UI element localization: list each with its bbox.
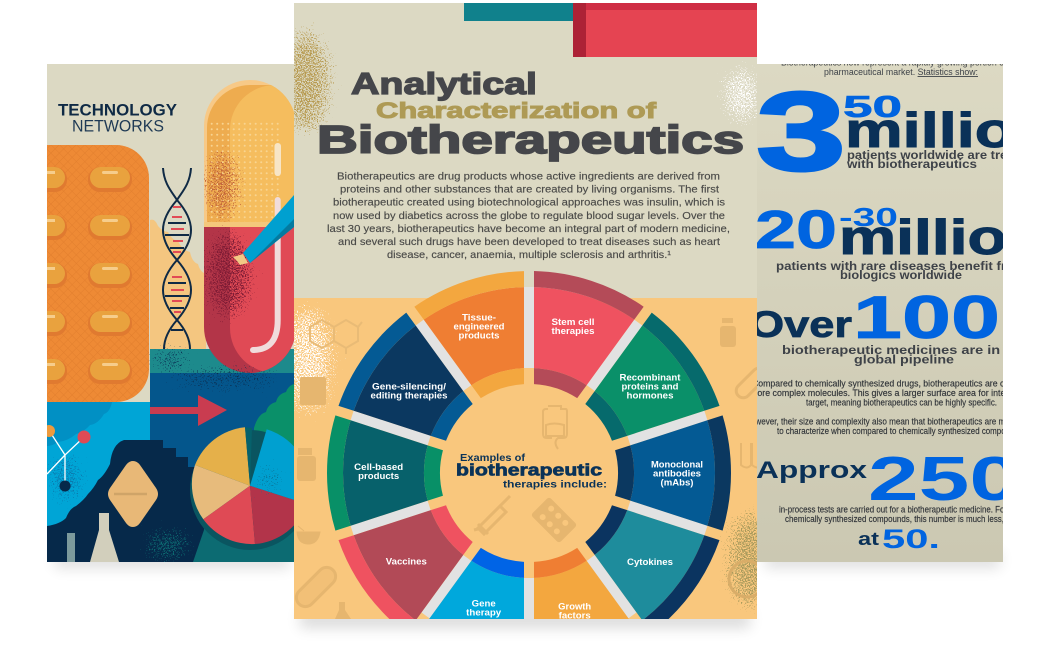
stat: 20-30 million: patients with rare diseases benefit from [776, 261, 1026, 273]
body text: However, their size and complexity also mean that biotherapeutics are more [745, 417, 1017, 427]
stat: 20-30 million: biologics worldwide [840, 270, 962, 282]
panel: left cover illustration [47, 64, 294, 562]
intro lines [781, 58, 1021, 77]
segment: stem cell therapies: Stem cell [552, 317, 594, 327]
wheel centre heading [456, 452, 607, 490]
segment: cell-based products: products [358, 471, 399, 481]
segment: monoclonal antibodies: antibodies [653, 468, 701, 478]
teal corner [193, 527, 294, 562]
segment: tissue-engineered products: products [458, 331, 500, 341]
dark blue block [150, 373, 294, 530]
flask and tube [67, 513, 119, 562]
capsule [204, 80, 294, 373]
segment: gene-silencing/editing therapies: Gene-silencing/ [372, 381, 447, 391]
intro paragraph: Biotherapeutics are drug products whose active ingredients are derived from [337, 170, 720, 182]
blue lower-left area [47, 402, 150, 526]
icon: beaker [300, 377, 326, 405]
icon: test tubes [740, 443, 757, 468]
sand wave background [150, 220, 206, 349]
segment: gene therapy: Gene [472, 599, 496, 609]
segment: vaccines: Vaccines [386, 557, 427, 567]
segment: stem cell therapies: therapies [552, 326, 594, 336]
segment: monoclonal antibodies [602, 415, 756, 559]
segment: recombinant proteins and hormones: Recombinant [620, 372, 680, 382]
stat: at 50 [858, 524, 940, 554]
wheel centre heading: therapies include: [503, 478, 607, 490]
stat: approx 250 [756, 445, 1020, 514]
stat: 350 million: 3 [756, 69, 846, 194]
navy stepped shape [47, 440, 204, 562]
stat: over 100: global pipeline [854, 355, 954, 367]
icon: right bottle [720, 318, 736, 347]
stat: 20-30 million: -30 [839, 202, 898, 232]
red arrow [150, 395, 227, 426]
icon: mortar [297, 526, 320, 544]
logo: Technology Networks: NETWORKS [72, 117, 164, 136]
stat: 20-30 million [755, 200, 1046, 282]
stat: 350 million [756, 69, 1050, 194]
pipette and hand [233, 195, 294, 265]
segment: monoclonal antibodies: Monoclonal [651, 459, 703, 469]
intro paragraph: disease, cancer, anaemia, multiple sclerosis and arthritis.¹ [387, 249, 672, 261]
top colour blocks [464, 3, 757, 57]
segment: cell-based products [302, 387, 456, 531]
stat: over 100: biotherapeutic medicines are in the [782, 345, 1026, 357]
panel: right statistics [745, 58, 1050, 562]
pie chart [190, 427, 294, 550]
in-process text [779, 505, 1007, 524]
segment: cell-based products: Cell-based [354, 462, 403, 472]
sand lower background [294, 298, 757, 619]
segment: cytokines: Cytokines [627, 557, 673, 567]
stat: 350 million: patients worldwide are treated [847, 150, 1034, 162]
stat: 350 million: million [845, 104, 1050, 158]
wheel gaps [352, 287, 706, 619]
title: Characterization of [376, 98, 657, 123]
intro paragraph: biotherapeutic created using biotechnological approaches was insulin, which is [333, 197, 725, 209]
panel shadows [55, 552, 1000, 628]
segment: cytokines [582, 501, 720, 619]
in-process text: chemically synthesized compounds, this number is much less, [785, 514, 1004, 524]
icon: molecule [310, 320, 362, 354]
stat: 20-30 million: million [839, 211, 1046, 265]
segment: stem cell therapies [534, 271, 644, 398]
segment: monoclonal antibodies: (mAbs) [660, 477, 694, 487]
stat: over 100: Over [749, 304, 852, 345]
teal band [150, 349, 294, 373]
green wave [254, 384, 294, 446]
stat: 350 million: with biotherapeutics [846, 159, 977, 171]
icon: bandage [295, 566, 337, 608]
segment: gene-silencing/editing therapies: editing therapies [370, 390, 448, 400]
stat: approx 250: Approx [756, 457, 868, 484]
segment: growth factors [526, 536, 629, 620]
icon: pill pack [532, 498, 576, 542]
title: Biotherapeutics [317, 119, 744, 162]
speckle textures [274, 22, 780, 618]
in-process text: in-process tests are carried out for a biotherapeutic medicine. For [779, 505, 1007, 515]
segment: gene-silencing/editing therapies [338, 302, 493, 445]
segment: recombinant proteins and hormones: hormones [626, 390, 674, 400]
stat: 350 million: 50 [843, 89, 902, 124]
segment: tissue-engineered products [414, 242, 578, 410]
icon: syringe [474, 496, 510, 534]
logo: Technology Networks [58, 104, 177, 132]
body text [745, 379, 1050, 436]
icon: left bottle [297, 448, 316, 481]
stat: approx 250: 250 [868, 445, 1020, 514]
intro paragraph: now used by diabetics across the globe to regulate blood sugar levels. Over the [333, 210, 725, 222]
intro paragraph: and several such drugs have been developed to treat diseases such as heart [338, 236, 720, 248]
faded background icons [293, 318, 769, 619]
title [317, 66, 744, 162]
icon: right capsule [734, 367, 757, 400]
wheel centre heading: biotherapeutic [456, 462, 602, 480]
wheel centre heading: Examples of [460, 452, 526, 464]
intro paragraph: last 30 years, biotherapeutics have become an integral part of modern medicine, [327, 223, 730, 235]
diamond tablet [108, 461, 158, 527]
intro lines: pharmaceutical market. Statistics show: [824, 67, 978, 77]
segment: vaccines [338, 500, 481, 619]
body text: Compared to chemically synthesized drugs, biotherapeutics are composed of [752, 379, 1050, 389]
molecule [43, 425, 90, 492]
body text: more complex molecules. This gives a larger surface area for interaction with [750, 388, 1050, 398]
icon: IV bag [543, 406, 567, 449]
intro lines: Biotherapeutics now represent a rapidly growing portion of the [781, 58, 1021, 68]
stat: 20-30 million: 20 [755, 200, 837, 260]
blister pack [47, 145, 149, 402]
segment: tissue-engineered products: engineered [454, 322, 504, 332]
segment: gene therapy [429, 548, 524, 619]
segment: growth factors: Growth [558, 601, 591, 611]
stat: at 50: at [858, 529, 879, 549]
icon: right pill circle [728, 560, 757, 598]
panel: central poster [274, 3, 780, 620]
title: Analytical [351, 66, 537, 101]
intro paragraph: proteins and other substances that are created by living organisms. The first [340, 184, 719, 196]
segment: tissue-engineered products: Tissue- [462, 313, 496, 323]
logo: Technology Networks: TECHNOLOGY [58, 101, 178, 120]
intro paragraph [327, 170, 730, 261]
stat: at 50: 50. [882, 524, 940, 554]
DNA helix [163, 168, 191, 349]
segment: gene therapy: therapy [466, 608, 501, 618]
icon: flask [335, 602, 351, 619]
segment: growth factors: factors [559, 610, 591, 620]
body text: target, meaning biotherapeutics can be highly specific. [806, 398, 997, 408]
segment: recombinant proteins and hormones: proteins and [622, 381, 678, 391]
stat: over 100 [749, 284, 1026, 367]
stat: over 100: 100 [853, 284, 1000, 351]
segment: recombinant proteins and hormones [577, 313, 740, 480]
therapy wheel [327, 271, 731, 619]
